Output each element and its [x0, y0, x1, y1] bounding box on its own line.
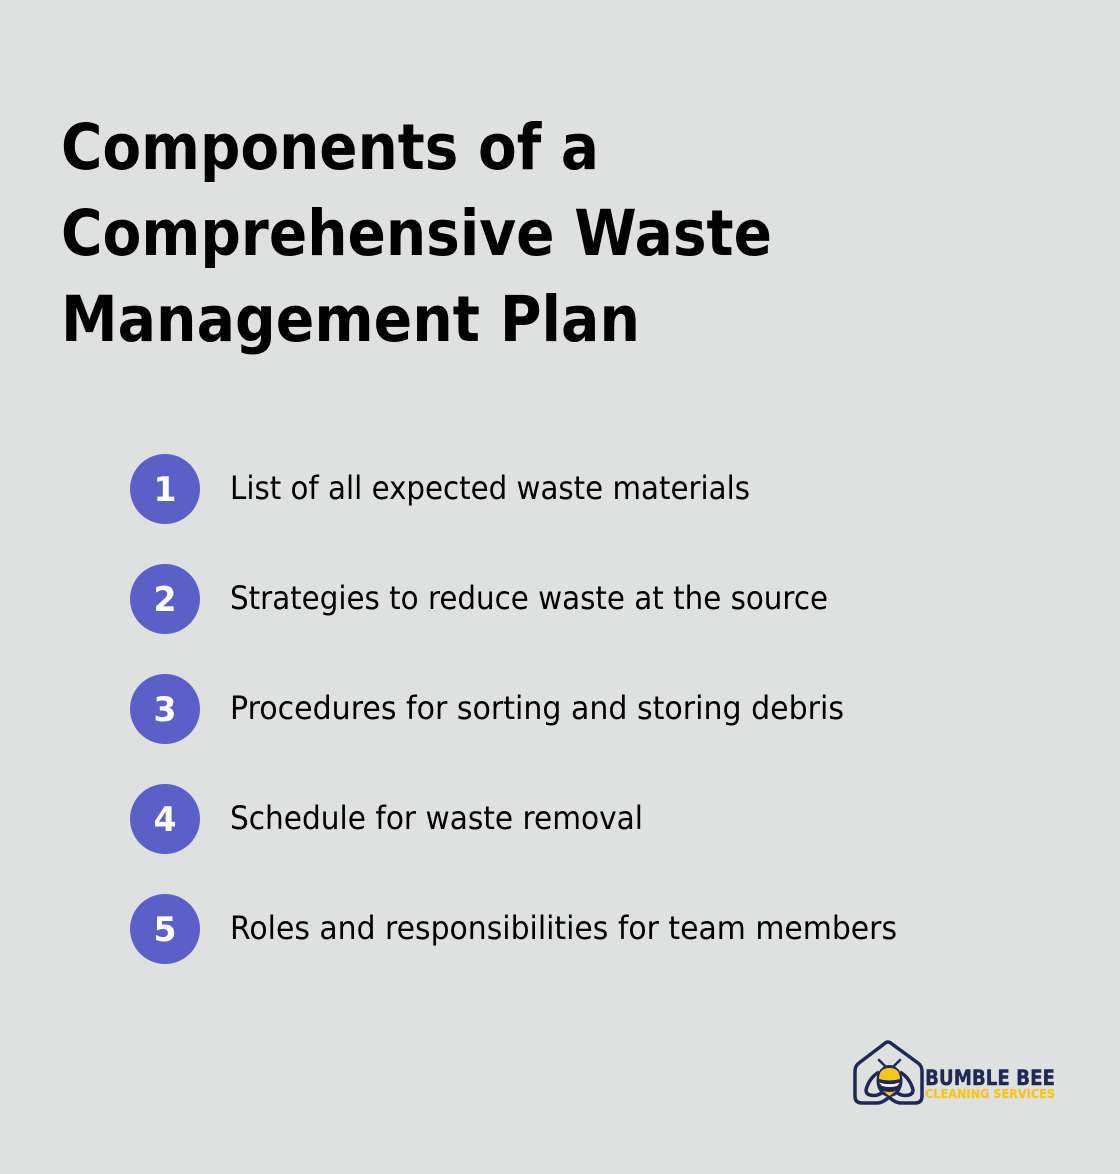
title	[61, 111, 772, 356]
title: Components of a	[61, 111, 599, 184]
icon: house with bee	[855, 1042, 922, 1103]
logo wordmark: BUMBLE BEE	[925, 1066, 1055, 1090]
list item 5: Roles and responsibilities for team members	[230, 909, 897, 947]
list item 4: Schedule for waste removal	[230, 799, 643, 837]
list item 2: Strategies to reduce waste at the source	[230, 579, 828, 617]
list item 1	[130, 454, 750, 524]
list item 3	[130, 674, 844, 744]
logo tagline: CLEANING SERVICES	[925, 1086, 1055, 1101]
list item 5	[130, 894, 897, 964]
list item 3: Procedures for sorting and storing debris	[230, 689, 844, 727]
list item 5: 5	[154, 910, 176, 950]
list item 2	[130, 564, 828, 634]
list item 1: List of all expected waste materials	[230, 469, 750, 507]
list item 2: 2	[154, 580, 176, 620]
logo	[855, 1042, 1055, 1103]
title: Comprehensive Waste	[61, 197, 772, 270]
title: Management Plan	[61, 283, 640, 356]
list item 1: 1	[154, 470, 176, 510]
list item 4	[130, 784, 643, 854]
list item 4: 4	[154, 800, 176, 840]
list item 3: 3	[154, 690, 176, 730]
